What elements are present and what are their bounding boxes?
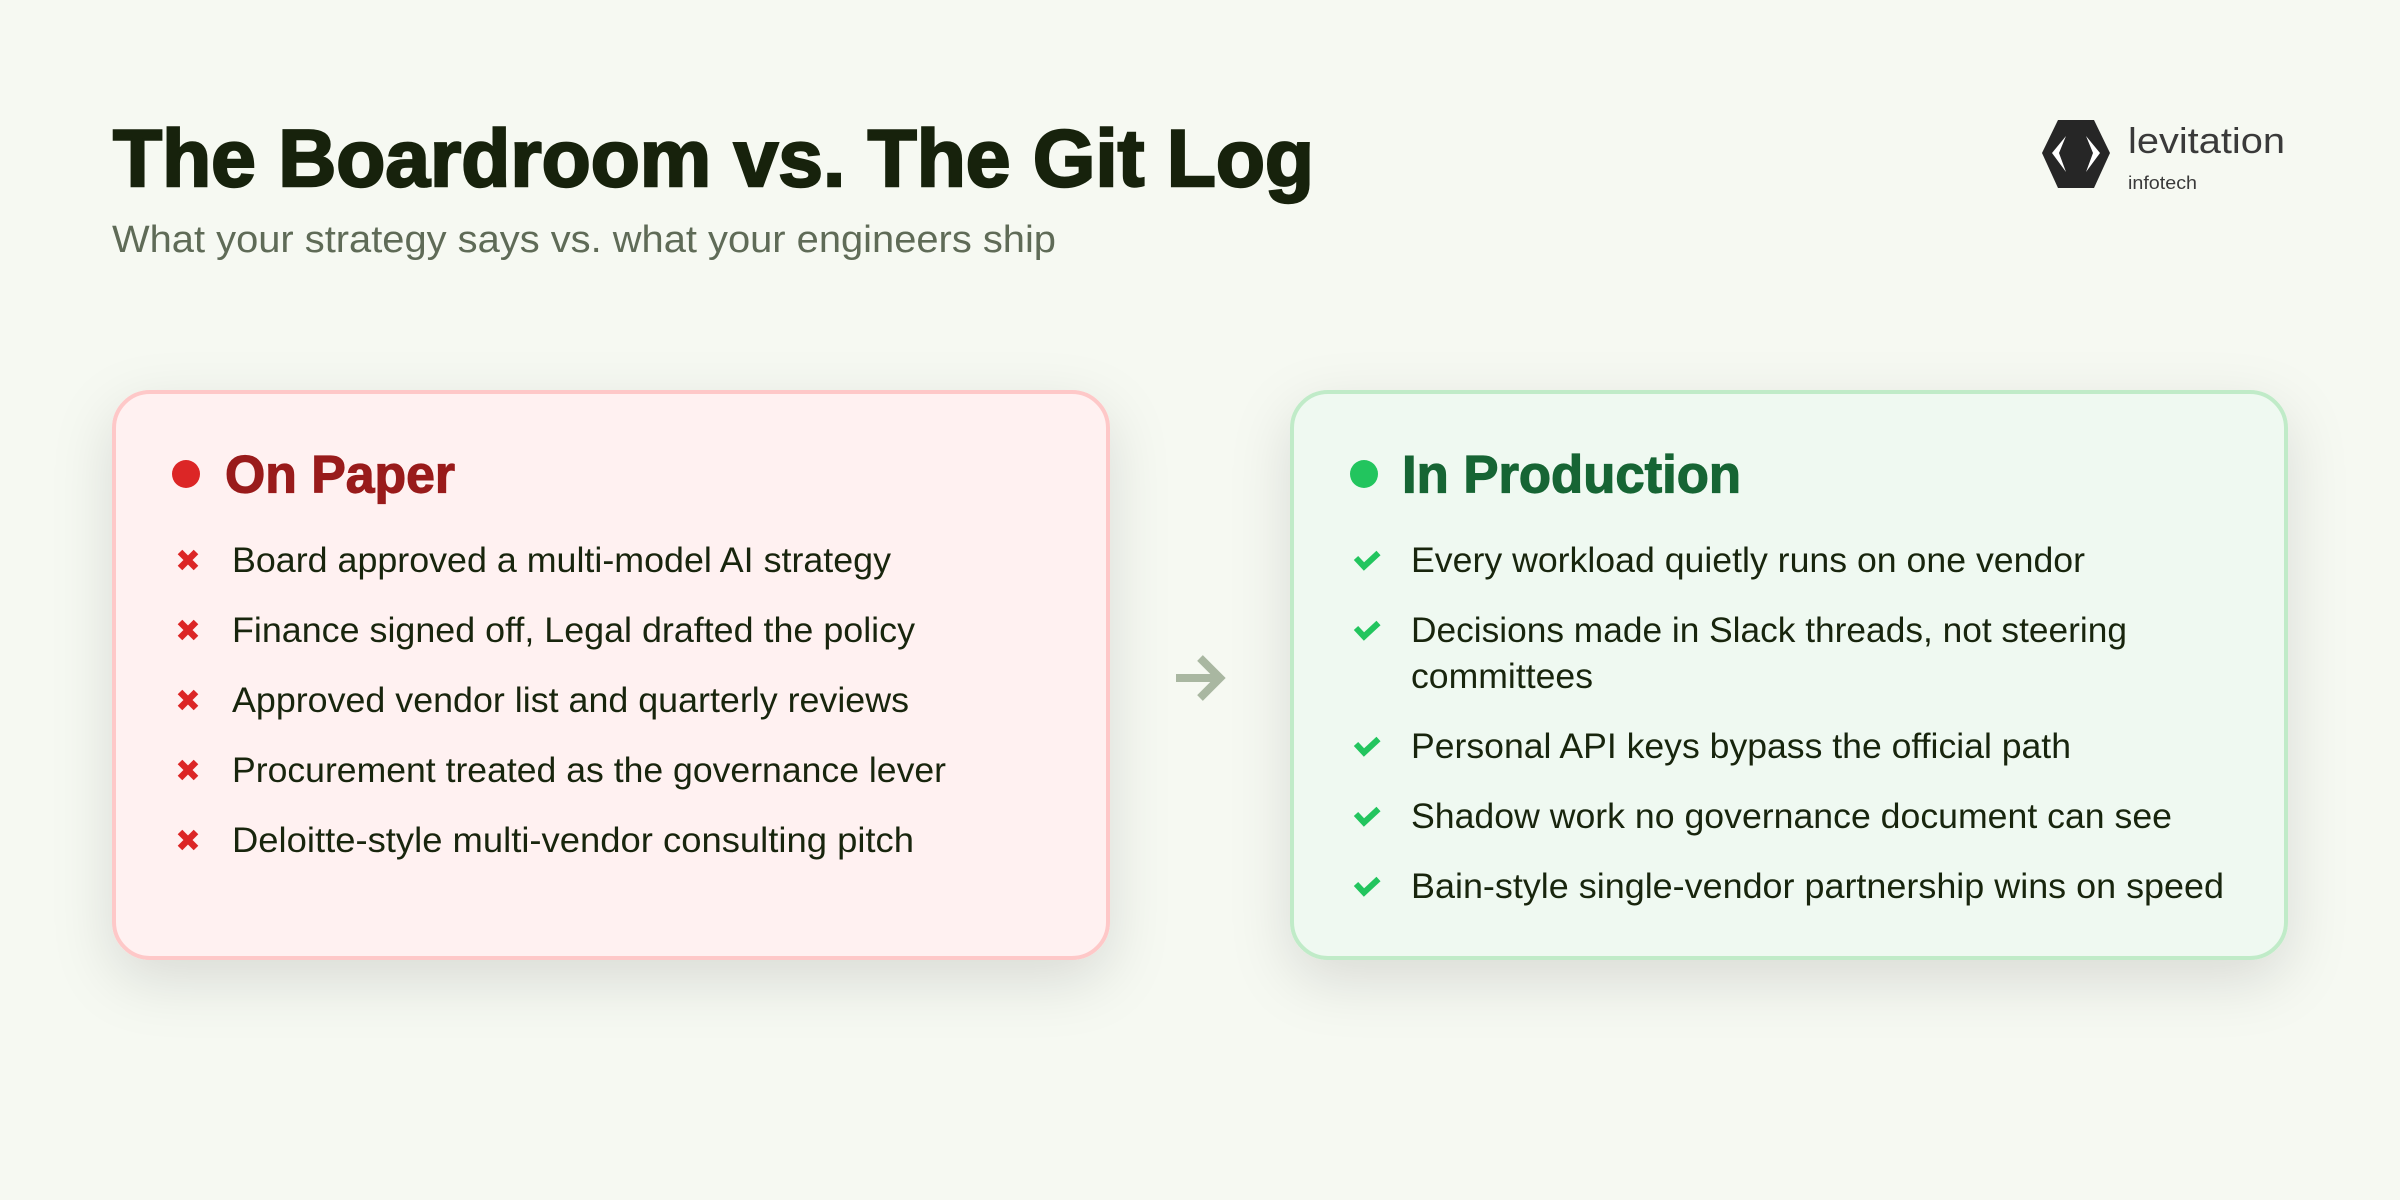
list item 3: [180, 681, 909, 720]
status dot: [172, 460, 200, 488]
list item 2: [180, 611, 916, 650]
logo tagline: infotech: [2128, 173, 2197, 193]
icon: cross: [180, 692, 196, 708]
icon: hexagon logo mark: [2042, 120, 2110, 188]
logo wordmark: levitation: [2128, 120, 2285, 161]
icon: check: [1356, 623, 1378, 636]
logo: levitation infotech: [2042, 120, 2285, 193]
item text: Board approved a multi-model AI strategy: [232, 541, 892, 580]
panel background: [1292, 392, 2286, 958]
list item 5: [180, 821, 914, 860]
heading: On Paper: [225, 446, 455, 504]
status dot: [1350, 460, 1378, 488]
item text: Approved vendor list and quarterly reviews: [232, 681, 909, 720]
icon: check: [1356, 809, 1378, 822]
item text: Personal API keys bypass the official path: [1411, 727, 2071, 766]
icon: cross: [180, 762, 196, 778]
list item 4: [180, 751, 946, 790]
arrow: [1176, 658, 1220, 698]
item text: Every workload quietly runs on one vendor: [1411, 541, 2085, 580]
item text continuation: committees: [1411, 657, 1593, 696]
panel: on paper: [114, 392, 1108, 958]
panel: in production: [1292, 392, 2286, 958]
item text: Procurement treated as the governance lever: [232, 751, 946, 790]
list item 5: [1356, 867, 2224, 906]
icon: cross: [180, 552, 196, 568]
icon: check: [1356, 879, 1378, 892]
title: The Boardroom vs. The Git Log: [113, 114, 1314, 204]
item text: Shadow work no governance document can see: [1411, 797, 2172, 836]
list item 3: [1356, 727, 2071, 766]
list item 2: [1356, 611, 2127, 696]
list item 1: [180, 541, 892, 580]
panel background: [114, 392, 1108, 958]
icon: cross: [180, 832, 196, 848]
list item 1: [1356, 541, 2085, 580]
icon: check: [1356, 553, 1378, 566]
icon: cross: [180, 622, 196, 638]
heading: In Production: [1402, 446, 1741, 504]
item text: Decisions made in Slack threads, not steering: [1411, 611, 2127, 650]
item text: Finance signed off, Legal drafted the policy: [232, 611, 916, 650]
list item 4: [1356, 797, 2172, 836]
item text: Deloitte-style multi-vendor consulting pitch: [232, 821, 914, 860]
icon: check: [1356, 739, 1378, 752]
item text: Bain-style single-vendor partnership wins on speed: [1411, 867, 2224, 906]
subtitle: What your strategy says vs. what your engineers ship: [112, 219, 1056, 261]
